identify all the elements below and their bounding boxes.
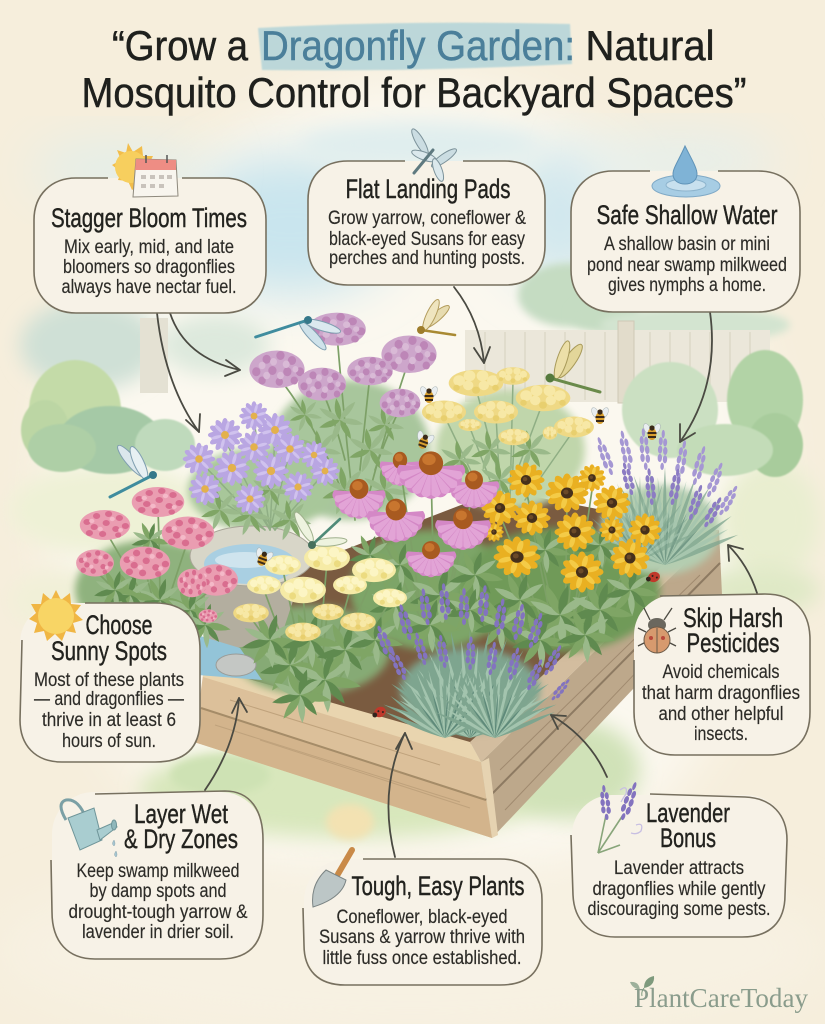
body text [328, 208, 526, 269]
heading: Bonus [660, 823, 716, 853]
logo: PlantCareToday [630, 976, 809, 1013]
bushes right [622, 350, 803, 477]
body text: dragonflies while gently [592, 879, 766, 900]
body text [34, 670, 184, 752]
body text: Coneflower, black-eyed [336, 907, 508, 928]
arrow: landing pads to yarrow [454, 287, 490, 363]
plant: purple asters [183, 401, 340, 541]
bees and ladybugs [251, 385, 662, 721]
heading: Pesticides [686, 628, 780, 658]
icon: water drop [652, 146, 720, 197]
dragonfly: over pond [292, 510, 347, 549]
body text [319, 907, 525, 969]
heading: Choose [86, 610, 152, 640]
dragonfly: blue left [110, 442, 157, 497]
plant foliage masses [75, 380, 720, 695]
body text [62, 237, 236, 298]
icon: lavender sprig [598, 781, 642, 853]
pond basin [190, 526, 314, 680]
title line 1: “Grow a [112, 22, 249, 69]
title line 1 [112, 22, 714, 69]
body text: drought-tough yarrow & [68, 902, 248, 923]
plant: front yarrow [233, 545, 407, 723]
heading: Skip Harsh [683, 603, 783, 633]
plant: joe-pye weed [249, 313, 437, 520]
heading: & Dry Zones [124, 824, 238, 854]
title [82, 22, 746, 116]
body text: Lavender attracts [614, 858, 744, 879]
body text: lavender in drier soil. [82, 922, 234, 943]
garden lawn [10, 460, 820, 840]
panel: stagger bloom times [34, 143, 266, 313]
body text: black-eyed Susans for easy [329, 229, 525, 250]
arrow: water to lavender [680, 312, 712, 442]
plant: back lavender [586, 428, 741, 568]
body text: Avoid chemicals [662, 662, 780, 683]
dragonfly: blue upper left [254, 307, 347, 371]
icon: trowel [313, 850, 352, 907]
body text: that harm dragonflies [642, 683, 800, 704]
icon: dragonfly [409, 127, 459, 183]
heading [646, 798, 730, 853]
icon: sun [29, 590, 83, 641]
panel: skip harsh pesticides [634, 594, 810, 755]
body text: gives nymphs a home. [608, 275, 766, 296]
body text: Susans & yarrow thrive with [319, 927, 525, 948]
heading: Layer Wet [134, 799, 228, 829]
title highlight [258, 23, 572, 70]
icon: sun and calendar [112, 143, 178, 197]
body text [642, 662, 800, 745]
dragonfly: amber [417, 298, 455, 335]
heading [124, 799, 238, 854]
panel: lavender bonus [571, 781, 787, 937]
body text: insects. [694, 724, 748, 745]
panel: flat landing pads [308, 127, 545, 285]
plant: black-eyed Susans [474, 462, 662, 668]
body text: perches and hunting posts. [329, 248, 525, 269]
heading: Flat Landing Pads [346, 174, 510, 204]
body text: — and dragonflies — [34, 689, 184, 710]
heading: Lavender [646, 798, 730, 828]
heading [51, 610, 167, 666]
body text: Keep swamp milkweed [76, 861, 240, 882]
body text [68, 861, 248, 943]
plant: back yarrow [422, 367, 594, 501]
body text: pond near swamp milkweed [587, 255, 787, 276]
garden background: sky, trees, fence [20, 121, 790, 403]
bushes left [21, 360, 195, 474]
body text: Mix early, mid, and late [64, 237, 234, 258]
panel: layer wet and dry zones [51, 791, 263, 959]
dragonfly: green [546, 339, 600, 392]
title line 1: Natural [586, 22, 714, 69]
heading: Sunny Spots [51, 636, 167, 666]
body text: little fuss once established. [322, 948, 522, 969]
title line 1: Dragonfly Garden: [261, 22, 575, 69]
icon: beetle [638, 608, 676, 653]
plant: coneflowers [332, 451, 504, 653]
raised wooden bed [194, 490, 722, 838]
body text: Grow yarrow, coneflower & [328, 208, 526, 229]
body text: by damp spots and [90, 881, 226, 902]
heading [683, 603, 783, 658]
body text: and other helpful [658, 704, 784, 725]
body text [587, 234, 787, 296]
logo leaf [630, 976, 654, 996]
plant: swamp milkweed [76, 487, 238, 649]
body text: discouraging some pests. [588, 899, 770, 920]
arrow: lavender bonus to bed [551, 715, 607, 777]
body text: thrive in at least 6 [42, 710, 176, 731]
logo wordmark: PlantCareToday [634, 983, 809, 1013]
arrow: stagger to joe-pye [170, 313, 240, 376]
panel: tough easy plants [303, 850, 542, 985]
panel: choose sunny spots [20, 590, 200, 762]
panel: safe shallow water [571, 146, 800, 312]
title line 2: Mosquito Control for Backyard Spaces” [82, 69, 746, 116]
arrow: tough plants to lavender [388, 733, 412, 857]
heading: Tough, Easy Plants [352, 871, 524, 901]
plant: front lavender [373, 583, 572, 741]
body text: always have nectar fuel. [62, 277, 236, 298]
body text: Most of these plants [34, 670, 184, 691]
icon: watering can [61, 800, 117, 857]
body text: A shallow basin or mini [604, 234, 770, 255]
body text: hours of sun. [62, 731, 156, 752]
arrow: stagger to asters [157, 313, 200, 432]
arrow: pesticides to bed [728, 545, 757, 593]
body text: bloomers so dragonflies [63, 257, 235, 278]
body text [588, 858, 770, 920]
arrow: wet dry zones to yarrow [205, 698, 247, 790]
heading: Stagger Bloom Times [51, 203, 247, 233]
